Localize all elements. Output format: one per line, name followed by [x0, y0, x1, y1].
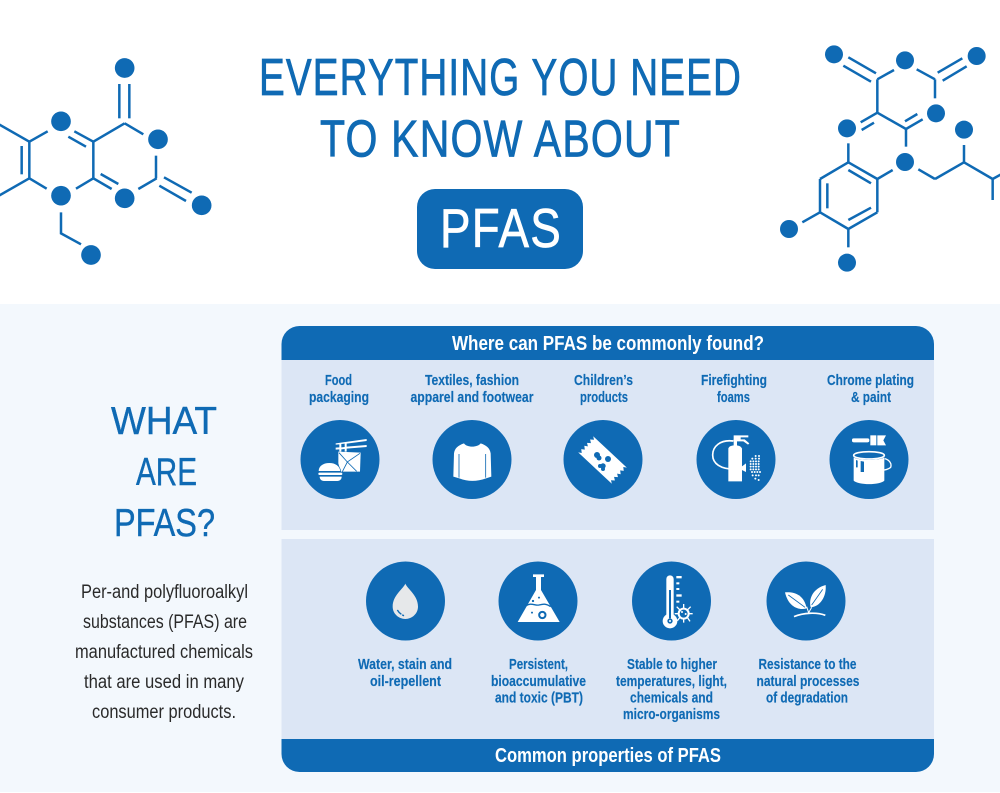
item: children's products: products — [580, 390, 628, 406]
title — [259, 49, 742, 168]
text block: PFAS definition: manufactured chemicals — [75, 642, 253, 663]
text block: PFAS definition: Per-and polyfluoroalkyl — [81, 582, 248, 603]
icon: plant sprout — [785, 585, 826, 617]
item: resistance to degradation — [756, 562, 860, 706]
panel header: where can PFAS be found — [282, 326, 934, 360]
item: food packaging — [300, 373, 380, 499]
title badge: PFAS: PFAS — [440, 197, 562, 259]
item: children's products — [564, 373, 642, 499]
item: stability: chemicals and — [630, 690, 713, 706]
item: chrome plating and paint — [827, 373, 914, 499]
item: resistance to degradation: natural processes — [756, 674, 860, 690]
item: food packaging: packaging — [309, 390, 369, 406]
item: food packaging: Food — [325, 373, 352, 389]
item: water repellent: Water, stain and — [358, 657, 452, 673]
text block: PFAS definition: substances (PFAS) are — [83, 612, 247, 633]
item: PBT: bioaccumulative — [491, 674, 586, 690]
heading: what are PFAS — [111, 400, 217, 545]
item: resistance to degradation: Resistance to the — [758, 657, 856, 673]
item: PBT: Persistent, — [509, 657, 568, 673]
icon: water drop — [393, 584, 418, 619]
item: water repellent — [358, 562, 452, 690]
panel: where PFAS are found — [282, 326, 934, 530]
item: chrome plating and paint: Chrome plating — [827, 373, 914, 389]
title: TO KNOW ABOUT — [320, 110, 681, 168]
icon: burger and noodle box — [318, 439, 367, 481]
panel footer: common properties: Common properties of PFAS — [495, 744, 721, 767]
panel: common properties — [282, 539, 934, 772]
icon: snack pouch — [578, 436, 627, 484]
title badge: PFAS — [417, 189, 583, 269]
item: textiles — [410, 373, 534, 499]
item: textiles: Textiles, fashion — [425, 373, 519, 389]
panel footer: common properties — [282, 739, 934, 772]
item: water repellent: oil-repellent — [370, 674, 441, 690]
icon: flask — [518, 574, 560, 622]
heading: what are PFAS: WHAT — [111, 400, 217, 443]
heading: what are PFAS: PFAS? — [114, 502, 215, 545]
item: PBT: and toxic (PBT) — [495, 690, 583, 706]
panel header: where can PFAS be found: Where can PFAS be commonly found? — [452, 332, 764, 355]
molecule: right decoration — [780, 45, 1000, 272]
text block: PFAS definition — [75, 582, 253, 723]
text block: PFAS definition: consumer products. — [92, 702, 236, 723]
item: stability: temperatures, light, — [616, 674, 727, 690]
molecule: left decoration — [0, 58, 211, 265]
heading: what are PFAS: ARE — [136, 451, 197, 494]
item: children's products: Children’s — [574, 373, 633, 389]
item: firefighting foams — [696, 373, 776, 499]
item: firefighting foams: foams — [717, 390, 750, 406]
item: firefighting foams: Firefighting — [701, 373, 767, 389]
title: EVERYTHING YOU NEED — [259, 49, 742, 107]
text block: PFAS definition: that are used in many — [84, 672, 244, 693]
item: chrome plating and paint: & paint — [851, 390, 891, 406]
icon: thermometer and microbe — [663, 575, 693, 628]
icon: sweater — [453, 443, 491, 481]
item: PBT — [491, 562, 586, 706]
item: resistance to degradation: of degradation — [766, 690, 848, 706]
item: stability — [616, 562, 727, 723]
icon: paint can and brush — [852, 435, 891, 484]
item: textiles: apparel and footwear — [410, 390, 534, 406]
icon: fire extinguisher — [713, 435, 761, 481]
item: stability: Stable to higher — [627, 657, 717, 673]
item: stability: micro-organisms — [623, 707, 720, 723]
